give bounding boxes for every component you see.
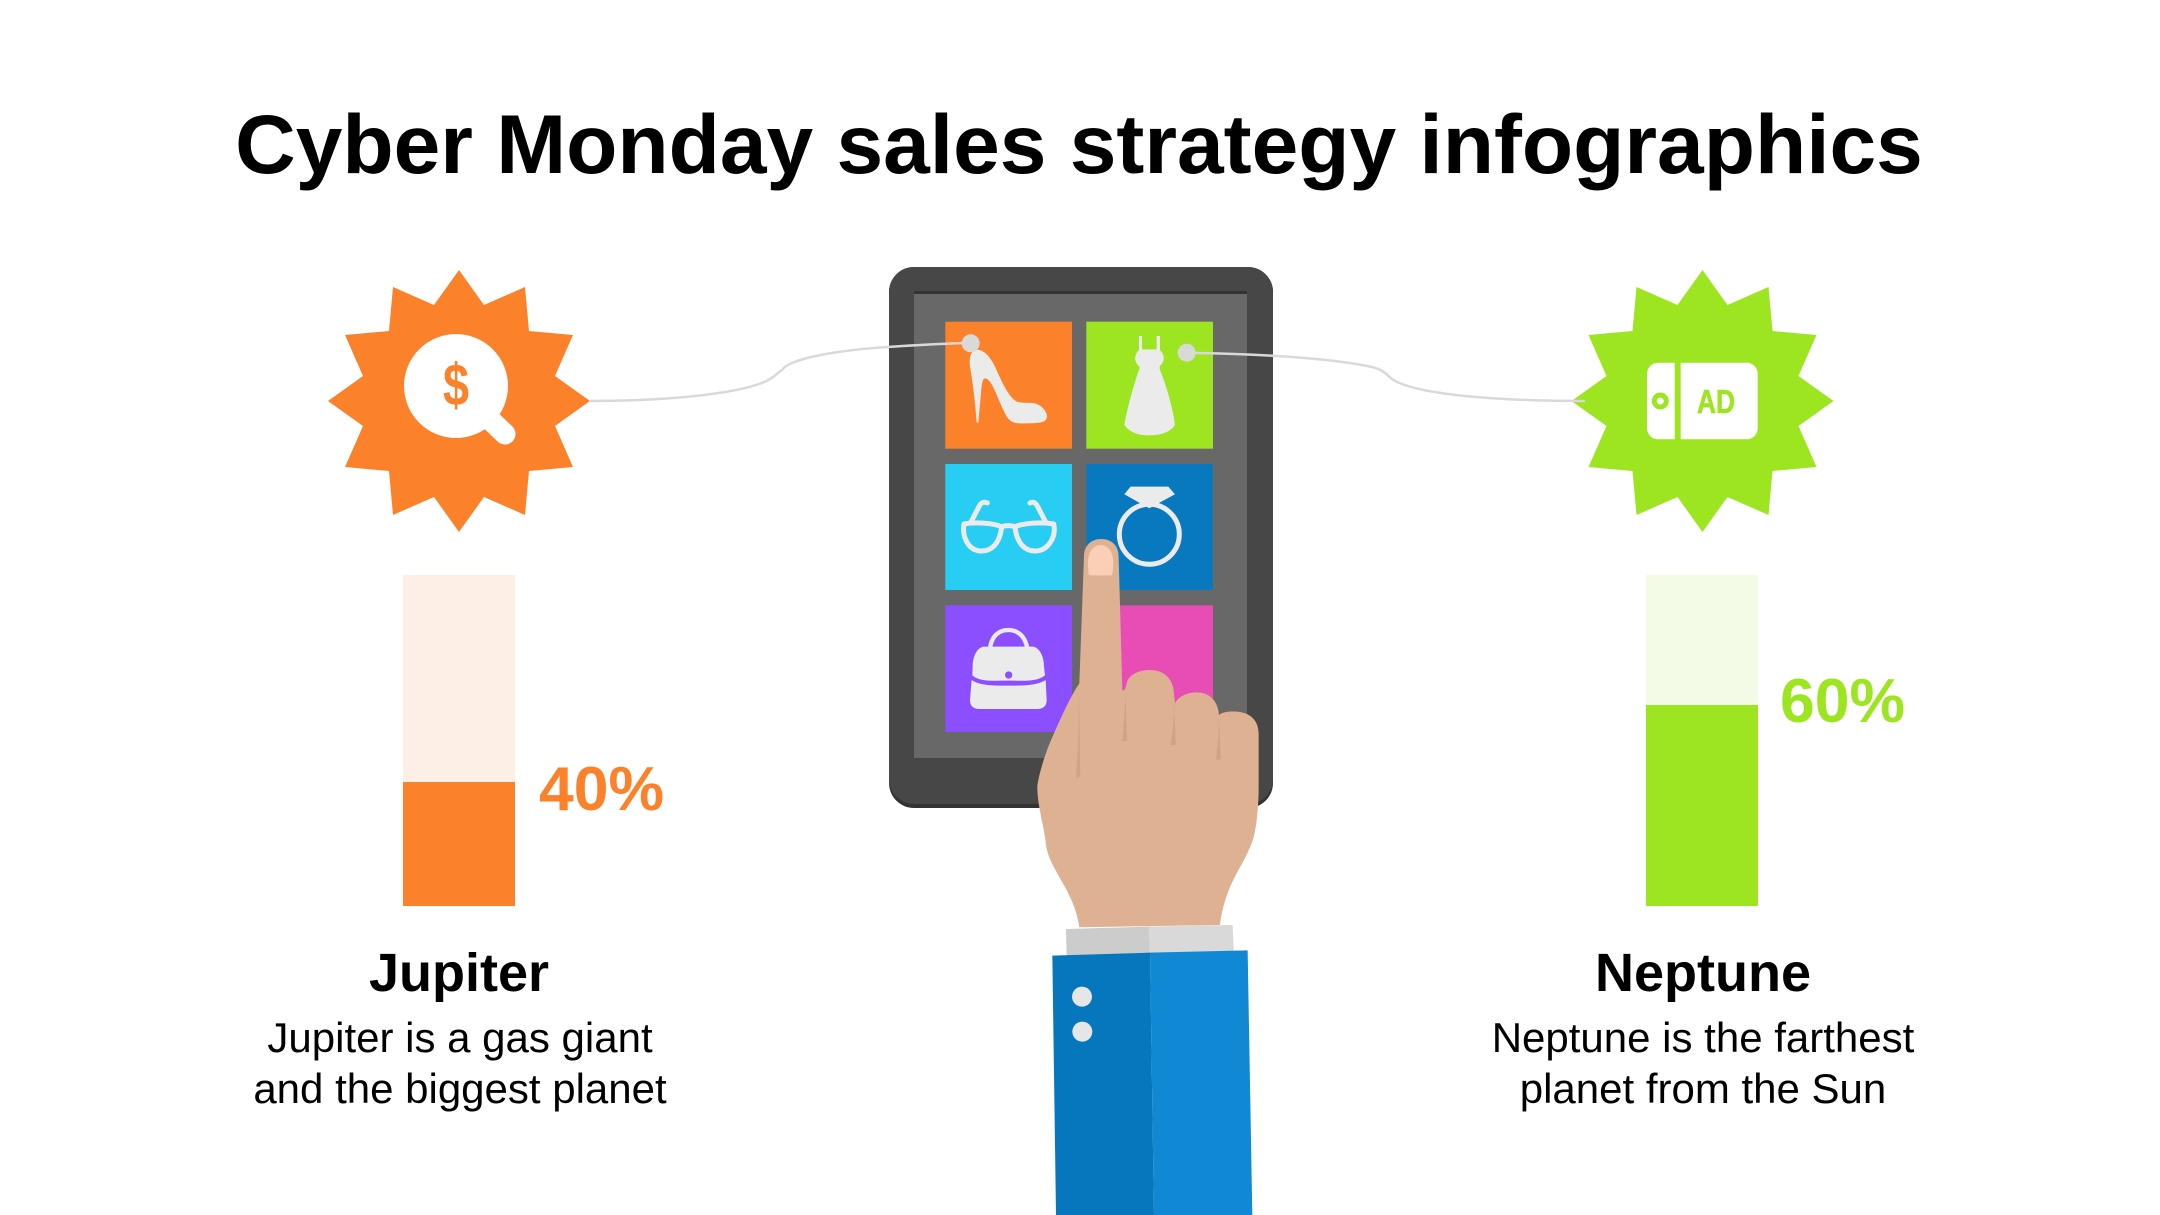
finger creases — [1076, 692, 1221, 778]
bar chart: 40% — [403, 575, 515, 906]
tile: bag — [945, 605, 1072, 732]
tile: ring — [1086, 464, 1213, 590]
buttons — [1072, 987, 1092, 1042]
heading: Jupiter: Jupiter — [369, 943, 549, 1003]
panel: Jupiter — [253, 270, 667, 1112]
title: Cyber Monday sales strategy infographics — [235, 97, 1923, 191]
icon: green starburst with AD sign — [1572, 270, 1834, 532]
tile: dress — [1086, 322, 1213, 449]
text: Jupiter description — [253, 1014, 667, 1112]
text: Jupiter description: Jupiter is a gas giant — [267, 1014, 653, 1061]
fingernail — [1088, 545, 1113, 575]
value: 60%: 60% — [1780, 666, 1905, 736]
icon: orange starburst with magnifier and dollar — [328, 270, 590, 532]
panel: Neptune — [1492, 270, 1915, 1112]
connector: dress to right star — [1178, 344, 1585, 401]
connector: left star to shoe — [590, 334, 980, 401]
sleeve and cuff — [1052, 925, 1252, 1215]
text: Neptune description: planet from the Sun — [1520, 1065, 1886, 1112]
icon: orange starburst with magnifier and dollar: $ — [443, 352, 469, 418]
bar chart: 60% — [1646, 575, 1758, 906]
text: Neptune description — [1492, 1014, 1915, 1112]
heading: Neptune: Neptune — [1595, 943, 1811, 1003]
tablet — [889, 267, 1273, 808]
tile: glasses — [945, 464, 1072, 590]
tile: pink — [1086, 605, 1213, 732]
value: 40%: 40% — [539, 754, 664, 824]
text: Jupiter description: and the biggest planet — [253, 1065, 667, 1112]
tile: shoe — [945, 322, 1072, 449]
hand — [1037, 539, 1259, 927]
text: Neptune description: Neptune is the farthest — [1492, 1014, 1915, 1061]
icon: green starburst with AD sign: AD — [1697, 383, 1735, 420]
